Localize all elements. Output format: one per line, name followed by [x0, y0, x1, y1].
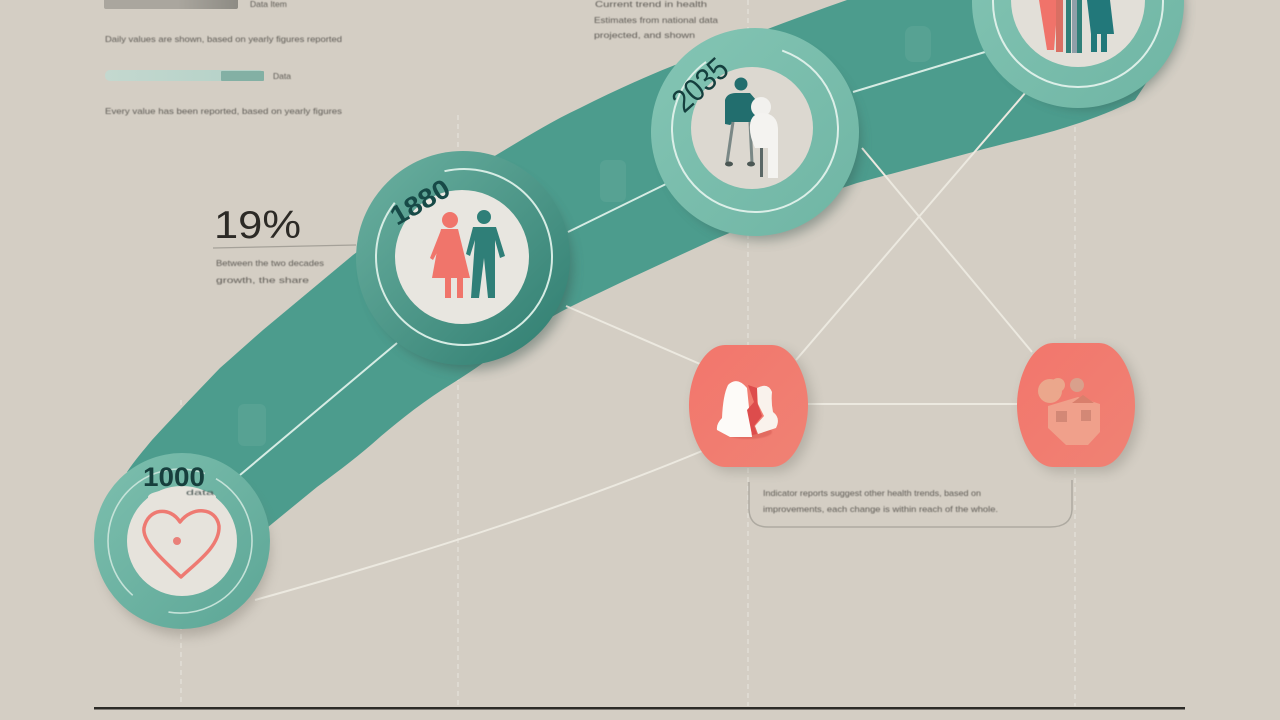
milestone top right family — [972, 0, 1184, 108]
legend bar grey — [104, 0, 238, 9]
year sublabel smudge: data — [186, 490, 214, 497]
vertical guide lines — [181, 0, 1075, 706]
coral badge: house — [1017, 343, 1140, 472]
legend bar teal — [105, 70, 264, 81]
note box: improvements, each change is within reach of the whole. — [763, 504, 998, 514]
baseline axis — [94, 707, 1185, 710]
stat callout 19%: 19% — [214, 204, 301, 247]
icon: heart — [144, 511, 219, 577]
ribbon connector lines — [240, 52, 985, 475]
stat callout 19%: Between the two decades — [216, 258, 324, 268]
icon: man — [466, 210, 505, 298]
year label: 2035 — [665, 50, 736, 119]
icon: split figures — [717, 381, 778, 439]
icon: standing person — [725, 78, 756, 166]
year label: 1880 — [385, 173, 455, 231]
legend caption one: Daily values are shown, based on yearly figures reported — [105, 34, 342, 44]
top centre text block — [594, 0, 718, 40]
milestone 2035 elders — [649, 23, 861, 240]
faint ribbon icons — [238, 26, 931, 446]
note box: Indicator reports suggest other health trends, based on — [763, 488, 981, 498]
top centre text block: projected, and shown — [594, 30, 695, 40]
icon: house — [1038, 378, 1100, 445]
year label: 1000 — [143, 462, 205, 492]
milestone 1880 couple — [356, 149, 572, 370]
note box — [749, 480, 1072, 527]
legend label two: Data — [273, 71, 291, 81]
stat callout 19% — [213, 204, 356, 285]
stat callout 19%: growth, the share — [216, 275, 309, 285]
milestone 1000 heart — [82, 443, 278, 639]
icon: family — [1039, 0, 1114, 53]
teal ribbon band — [127, 0, 1160, 532]
legend caption two: Every value has been reported, based on yearly figures — [105, 106, 342, 116]
top legend — [104, 0, 342, 116]
network connector lines — [255, 92, 1032, 600]
icon: woman — [430, 212, 470, 298]
coral badge: broken heart figures — [689, 345, 813, 472]
icon: elder figure — [750, 97, 778, 178]
top centre text block: Estimates from national data — [594, 15, 718, 25]
